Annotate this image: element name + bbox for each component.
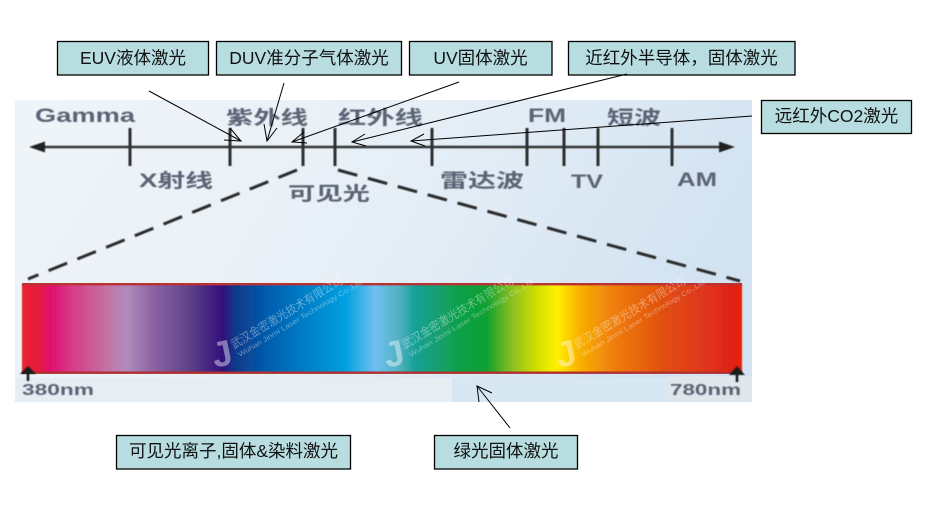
band labels: 雷达波 <box>440 170 524 192</box>
callout: green <box>434 436 578 469</box>
band labels: TV <box>571 172 603 193</box>
arrow: UV <box>292 82 459 143</box>
band labels <box>35 106 717 205</box>
watermarks: 武汉金密激光技术有限公司 <box>228 273 345 352</box>
panel: electromagnetic spectrum image <box>15 100 752 402</box>
wavelength endpoints: 380nm <box>22 382 94 399</box>
callout: EUV: EUV液体激光 <box>80 48 186 68</box>
watermarks: Wuhan Jinmi Laser Technology Co.,Ltd <box>237 279 364 359</box>
arrow: EUV <box>149 91 241 141</box>
band labels: Gamma <box>35 106 136 127</box>
wavelength endpoints: 780nm <box>670 382 741 399</box>
band labels: 紫外线 <box>226 107 308 129</box>
callout: near infrared <box>568 42 795 75</box>
callout: far infrared CO2 <box>762 100 912 134</box>
band labels: 短波 <box>607 107 661 129</box>
arrow: green <box>477 386 510 428</box>
watermarks: Wuhan Jinmi Laser Technology Co.,Ltd <box>580 279 707 359</box>
dashed zoom lines <box>28 170 740 281</box>
callout: visible: 可见光离子,固体&染料激光 <box>129 441 338 461</box>
callout: DUV: DUV准分子气体激光 <box>229 48 389 68</box>
callout: UV <box>410 42 552 75</box>
watermarks: J <box>552 331 580 376</box>
band labels: FM <box>528 106 566 127</box>
callout: EUV <box>58 42 208 75</box>
wavelength endpoints <box>20 366 745 399</box>
band labels: AM <box>677 170 717 191</box>
arrow: near infrared <box>352 74 627 146</box>
watermarks: Wuhan Jinmi Laser Technology Co.,Ltd <box>408 279 535 359</box>
watermarks <box>208 264 707 376</box>
watermarks: 武汉金密激光技术有限公司 <box>571 273 688 352</box>
arrow: DUV <box>264 83 284 141</box>
band labels: 可见光 <box>288 183 370 205</box>
band labels: X射线 <box>139 170 213 192</box>
band labels: 红外线 <box>338 107 423 129</box>
callout: UV: UV固体激光 <box>433 48 528 68</box>
callout: far infrared CO2: 远红外CO2激光 <box>775 106 898 126</box>
callout: visible <box>116 436 350 469</box>
callout: near infrared: 近红外半导体，固体激光 <box>585 48 778 68</box>
watermarks: J <box>208 331 236 376</box>
callout: green: 绿光固体激光 <box>454 441 558 461</box>
watermarks: J <box>380 331 408 376</box>
arrow: far infrared <box>411 116 752 146</box>
spectrum axis <box>29 128 735 166</box>
visible spectrum bar <box>22 283 742 374</box>
callout: DUV <box>216 42 402 75</box>
watermarks: 武汉金密激光技术有限公司 <box>399 273 516 352</box>
